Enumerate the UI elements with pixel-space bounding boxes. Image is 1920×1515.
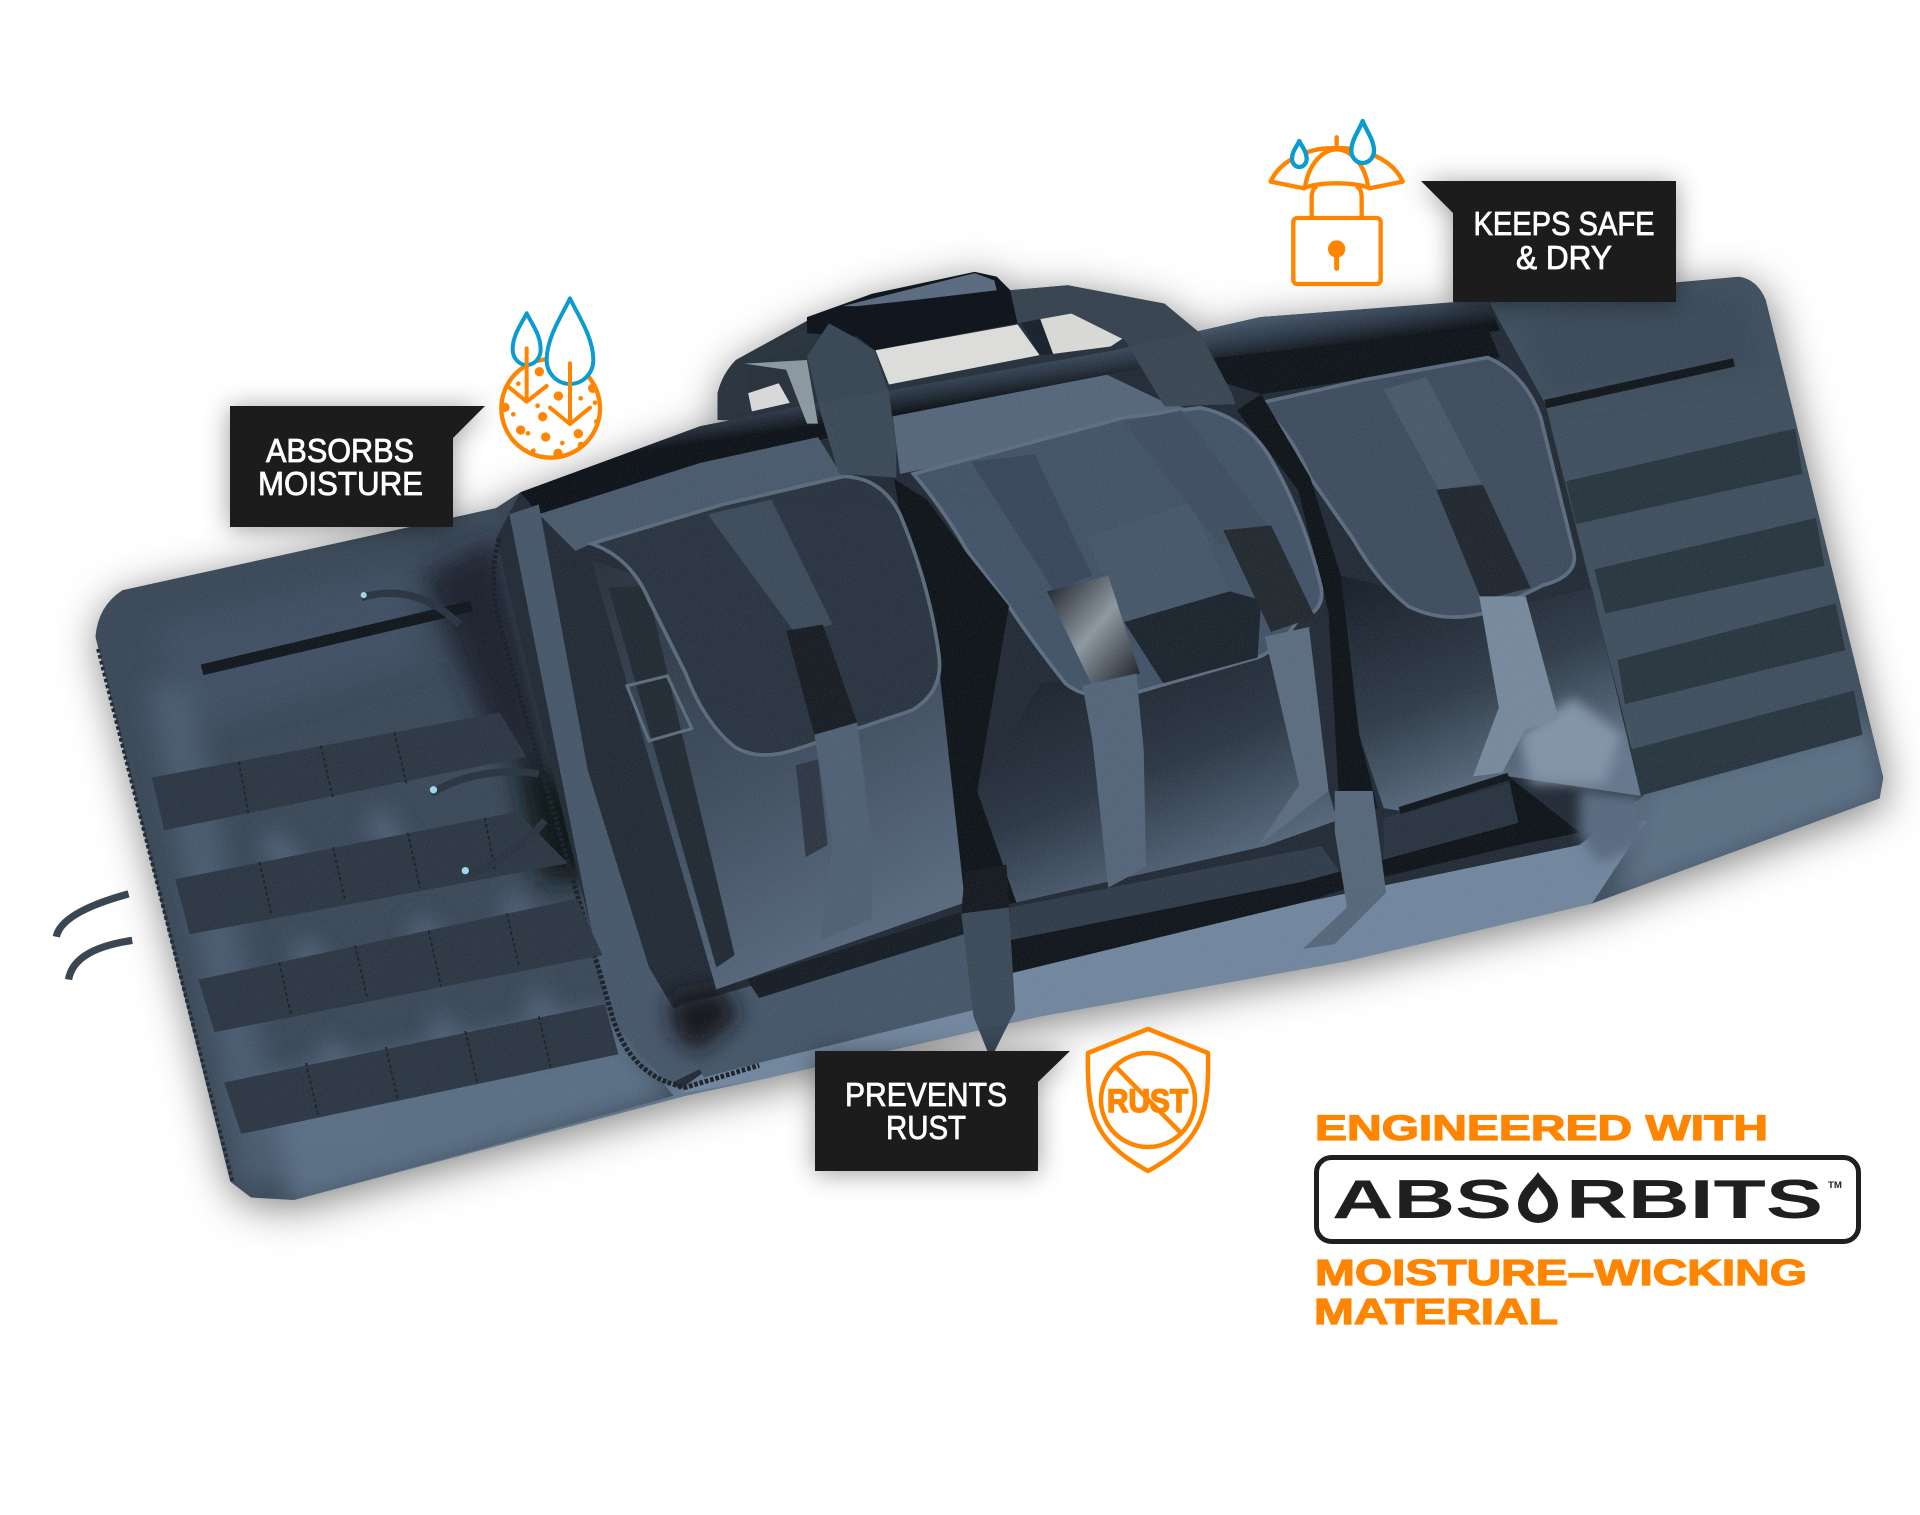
velcro strip: [796, 759, 828, 857]
absorbits logo letters: ABS: [1332, 1168, 1512, 1230]
pocket 3: [1255, 358, 1641, 811]
flap: [1255, 358, 1574, 617]
grip highlight: [842, 273, 997, 306]
label text: PREVENTS: [845, 1076, 1007, 1113]
rust word: RUST: [1107, 1083, 1188, 1119]
left panel ripples: [276, 823, 557, 1078]
logo drop: [1518, 1172, 1558, 1223]
left strap: [971, 454, 1092, 591]
zipper fold: [747, 912, 967, 998]
velcro patch: [1086, 502, 1229, 622]
label text: [845, 1076, 1007, 1146]
label box: [815, 1051, 1070, 1171]
black corner under pocket 1: [667, 986, 741, 1053]
absorbits logo letters: [1332, 1168, 1842, 1230]
label text: ABSORBS: [266, 432, 414, 469]
keyhole: [1328, 240, 1345, 258]
zipper flap: [509, 504, 708, 1085]
gap under right strap: [1040, 313, 1125, 354]
brand block: MATERIAL: [1314, 1291, 1558, 1332]
sphere: [501, 359, 600, 458]
label box: [1421, 181, 1676, 302]
right MOLLE straps: [1566, 429, 1862, 796]
black fold at pocket 3 corner: [1384, 776, 1580, 877]
padlock shackle: [1312, 186, 1362, 217]
absorbits logo letters: RBITS: [1566, 1168, 1823, 1230]
fabric wedge near right panel: [1580, 790, 1647, 863]
label text: MOISTURE: [258, 465, 423, 502]
bottom light band: [680, 820, 1647, 1093]
gap under grip: [876, 324, 1040, 384]
buckle: [1436, 485, 1531, 600]
right strap: [1124, 410, 1271, 545]
icon: moisture absorbing sphere: [500, 298, 600, 458]
umbrella: [1271, 137, 1403, 188]
pores: [500, 367, 599, 458]
end zipper pulls: [56, 894, 132, 980]
black gap between pockets 1 and 2: [894, 479, 1016, 912]
right end panel: [1488, 277, 1883, 904]
side loop: [627, 676, 692, 741]
body: [977, 658, 1337, 902]
label text: & DRY: [1516, 239, 1612, 276]
label text: KEEPS SAFE: [1474, 205, 1654, 242]
brand block: [1314, 1109, 1858, 1332]
carry handle: [718, 272, 1236, 478]
centre strap over roll: [807, 323, 896, 478]
label: absorbs moisture: [230, 406, 485, 527]
upper strap: [1384, 377, 1482, 490]
moisture-wicking material: MOISTURE–WICKING: [1315, 1252, 1807, 1293]
fabric above pockets centre: [893, 375, 1193, 474]
fabric above pockets left: [539, 437, 845, 551]
left pocket zipper: [202, 606, 471, 670]
padded top roll: [520, 300, 1500, 514]
flap: [591, 476, 940, 755]
lower pocket band: [1009, 846, 1347, 940]
case fabric layers: [96, 277, 1883, 1206]
label box: [230, 406, 485, 527]
body: [591, 561, 965, 989]
label: prevents rust: [815, 1051, 1070, 1171]
lower strap: [814, 722, 872, 940]
case silhouette with shadow: [96, 272, 1883, 1200]
product photo: rifle case: [56, 245, 1910, 1224]
drops: [1292, 121, 1374, 167]
absorbits logo box: [1316, 1158, 1858, 1242]
strap stitching: [239, 732, 551, 1117]
label text: [1474, 205, 1654, 276]
right handle strap: [1010, 285, 1236, 407]
grip: [807, 272, 1018, 350]
arrows: [508, 348, 590, 424]
icon: umbrella over padlock: [1271, 121, 1403, 284]
label text: RUST: [886, 1109, 966, 1146]
body: [1341, 576, 1641, 811]
padlock body: [1293, 218, 1381, 284]
pocket 2: [913, 408, 1337, 902]
gap under rear strap: [748, 383, 790, 411]
black fold under pockets: [1009, 860, 1384, 973]
black gap between pockets 2 and 3: [1237, 394, 1378, 833]
absorbits logo letters: TM: [1828, 1180, 1842, 1190]
pocket 1: [591, 476, 967, 998]
right panel patches: [1612, 718, 1883, 894]
icon: no rust shield: [1088, 1029, 1208, 1171]
left panel light and dark patches: [147, 539, 673, 1206]
main zipper: [493, 539, 759, 1087]
engineered with: ENGINEERED WITH: [1315, 1109, 1768, 1148]
cord pulls on left panel: [361, 593, 545, 876]
fabric grain overlay: [73, 245, 1910, 1224]
side release buckle: [744, 360, 818, 424]
main compartment: [496, 300, 1643, 1090]
buckle: [786, 624, 857, 735]
roll black underside: [1214, 332, 1500, 394]
flap: [913, 408, 1322, 696]
prohibition circle: [1101, 1053, 1195, 1147]
right lower strap: [1258, 627, 1329, 846]
label text: [258, 432, 423, 502]
rear inner strap: [1021, 318, 1053, 355]
right buckle: [1223, 525, 1315, 632]
lower strap: [1473, 596, 1559, 776]
rear strap: [718, 329, 807, 420]
left edge zipper: [98, 649, 233, 1182]
label: keeps safe and dry: [1421, 181, 1676, 302]
left lower strap: [1082, 673, 1146, 888]
strip below pocket 3: [1384, 784, 1518, 860]
side slot: [609, 585, 735, 967]
drops: [513, 298, 593, 384]
left end panel: [96, 508, 673, 1200]
fabric under pocket 1: [674, 934, 973, 1078]
zipper line: [1400, 776, 1509, 811]
lower cross straps: [961, 791, 1386, 1059]
left buckle: [1047, 576, 1140, 686]
shield: [1088, 1029, 1208, 1171]
right pocket zipper: [1545, 362, 1734, 404]
upper strap: [708, 500, 833, 634]
prohibition slash: [1116, 1067, 1180, 1132]
cord tips: [361, 592, 469, 874]
fold highlight: [1518, 698, 1622, 784]
left MOLLE straps: [152, 713, 618, 1134]
flap shadow: [1124, 591, 1261, 683]
